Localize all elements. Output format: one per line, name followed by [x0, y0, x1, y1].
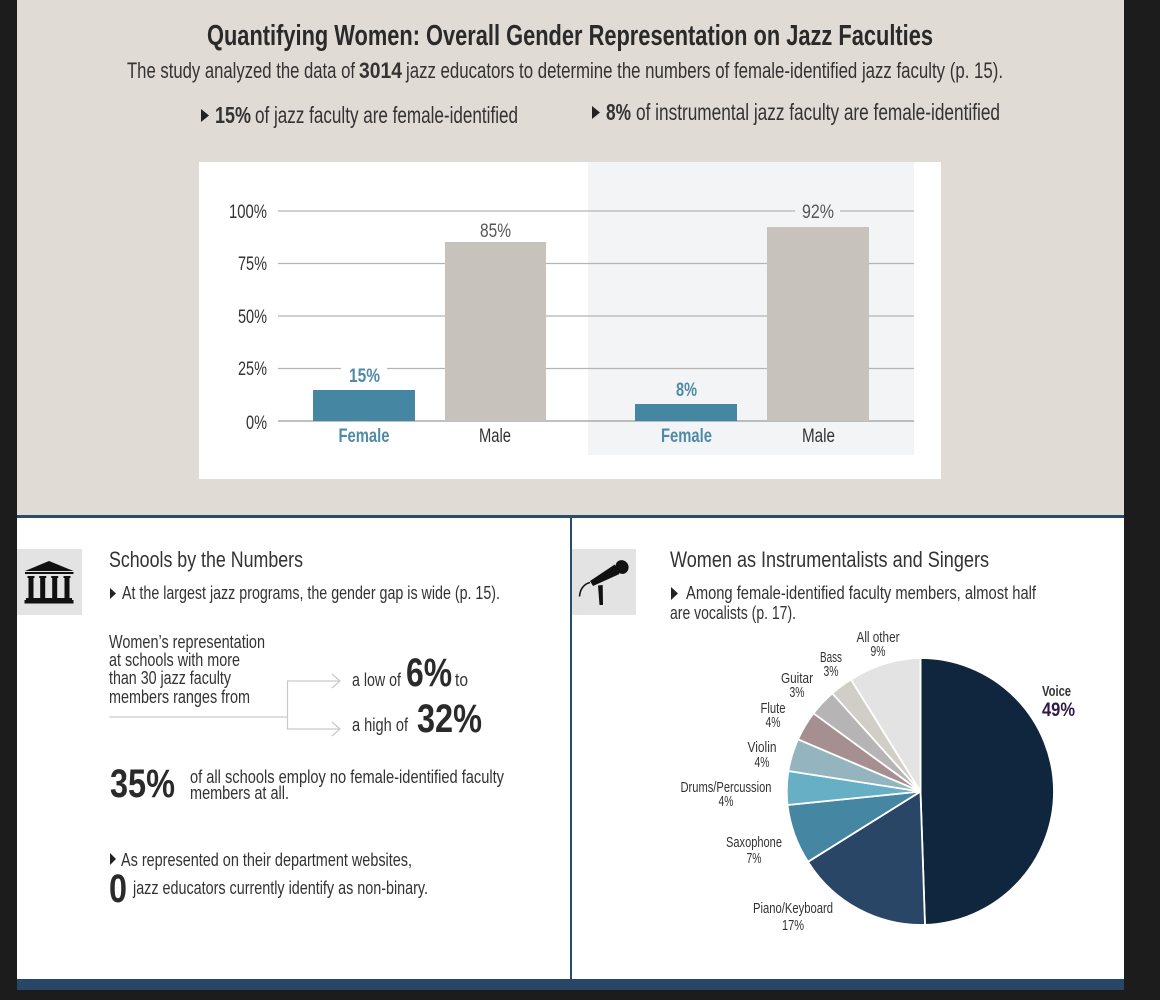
title: Quantifying Women: Overall Gender Representation on Jazz Faculties: [207, 20, 933, 52]
stat: low of 6%: a low of: [352, 670, 402, 690]
text block: representation: at schools with more: [109, 650, 240, 670]
pie labels: Piano/Keyboard: [753, 900, 833, 917]
bar: male 85%: Male: [479, 426, 511, 447]
bar: female 8%: [635, 380, 737, 447]
bar: female 15%: Female: [338, 426, 390, 447]
subtitle: The study analyzed the data of: [127, 58, 356, 83]
bar: male 92%: 92%: [802, 202, 834, 223]
slice: violin: [788, 739, 920, 792]
bar: male 85%: [445, 221, 546, 447]
bullet: vocalists: Among female-identified faculty members, almost half: [686, 583, 1037, 603]
pie labels: [680, 629, 900, 934]
stat: high of 32%: a high of: [352, 715, 409, 735]
pie labels: 7%: [746, 850, 762, 867]
stat: low of 6%: to: [455, 670, 468, 690]
stat: low of 6%: [352, 651, 468, 695]
slice: bass: [832, 680, 920, 792]
pie labels: Guitar: [781, 670, 813, 687]
bullet: gender gap: At the largest jazz programs, the gender gap is wide (p. 15).: [122, 583, 500, 603]
callout: 8 percent: [592, 99, 1000, 125]
axis labels: 25%: [238, 359, 267, 380]
bullet: vocalists: [670, 583, 1037, 623]
subtitle: 3014: [359, 58, 403, 83]
pie labels: 3%: [790, 684, 804, 701]
pie labels: Bass: [820, 649, 842, 666]
panel: schools by the numbers: [17, 547, 504, 911]
callout: 8 percent: of instrumental jazz faculty are female-identified: [636, 99, 1000, 125]
stat: 35% of schools: members at all.: [190, 783, 289, 803]
slice: guitar: [814, 693, 920, 792]
slice: drums/percussion: [787, 771, 920, 805]
slice: piano/keyboard: [808, 792, 925, 925]
slice: voice: [920, 658, 1054, 925]
heading: Schools by the Numbers: [109, 547, 303, 572]
stat: high of 32%: [352, 697, 482, 741]
stat: non-binary educators: 0: [109, 867, 127, 911]
pie labels: Drums/Percussion: [680, 779, 772, 796]
pie label: voice: [1042, 683, 1075, 721]
bar: female 15%: 15%: [349, 366, 380, 387]
pie labels: 9%: [870, 643, 886, 660]
bar: male 92%: Male: [802, 426, 835, 447]
text block: representation: members ranges from: [109, 687, 250, 707]
axis labels: 75%: [238, 254, 267, 275]
text block: representation: than 30 jazz faculty: [109, 668, 231, 688]
pie label: voice: Voice: [1042, 683, 1071, 700]
panel: instrumentalists and singers: [572, 547, 1075, 934]
slice: flute: [798, 713, 920, 792]
slice: saxophone: [788, 792, 920, 862]
callout: 15 percent: [201, 102, 518, 128]
pie labels: All other: [856, 629, 900, 646]
bar: female 8%: 8%: [676, 380, 697, 401]
text block: representation: Women’s representation: [109, 632, 265, 652]
slice: all other: [851, 658, 920, 792]
stat: non-binary educators: [109, 850, 428, 911]
text block: representation: [109, 632, 265, 707]
stat: non-binary educators: jazz educators currently identify as non-binary.: [132, 878, 428, 898]
stat: 35% of schools: 35%: [110, 762, 175, 806]
pie labels: Violin: [748, 739, 776, 756]
stat: non-binary educators: As represented on their department websites,: [121, 850, 412, 870]
arrow: range bracket: [110, 674, 340, 736]
bullet: vocalists: are vocalists (p. 17).: [670, 603, 796, 623]
axis labels: 50%: [238, 307, 267, 328]
stat: 35% of schools: [110, 762, 504, 806]
bar: male 85%: 85%: [480, 221, 511, 242]
stat: high of 32%: 32%: [417, 697, 482, 741]
bar chart: [199, 162, 941, 479]
callout: 15 percent: 15%: [215, 102, 251, 128]
panel: overall representation: [17, 0, 1124, 515]
axis labels: 100%: [229, 202, 267, 223]
subtitle: [127, 58, 1003, 83]
pie label: voice: 49%: [1042, 700, 1075, 721]
bar: female 15%: [313, 366, 415, 447]
axis labels: [229, 202, 267, 434]
pie labels: 4%: [718, 793, 734, 810]
bar: male 92%: [767, 202, 869, 447]
pie labels: Saxophone: [726, 834, 782, 851]
pie labels: 4%: [754, 754, 770, 771]
bar: female 8%: Female: [661, 426, 712, 447]
stat: 35% of schools: of all schools employ no female-identified faculty: [190, 767, 504, 787]
pie chart: [680, 629, 1075, 934]
icon: microphone: [572, 549, 636, 615]
heading: Women as Instrumentalists and Singers: [670, 547, 989, 572]
pie labels: 3%: [824, 663, 838, 680]
pie labels: 4%: [766, 714, 780, 731]
pie labels: Flute: [760, 700, 786, 717]
callout: 15 percent: of jazz faculty are female-identified: [255, 102, 518, 128]
callout: 8 percent: 8%: [606, 99, 631, 125]
icon: institution building: [17, 549, 82, 615]
pie labels: 17%: [782, 917, 804, 934]
axis labels: 0%: [246, 413, 267, 434]
stat: low of 6%: 6%: [406, 651, 452, 695]
